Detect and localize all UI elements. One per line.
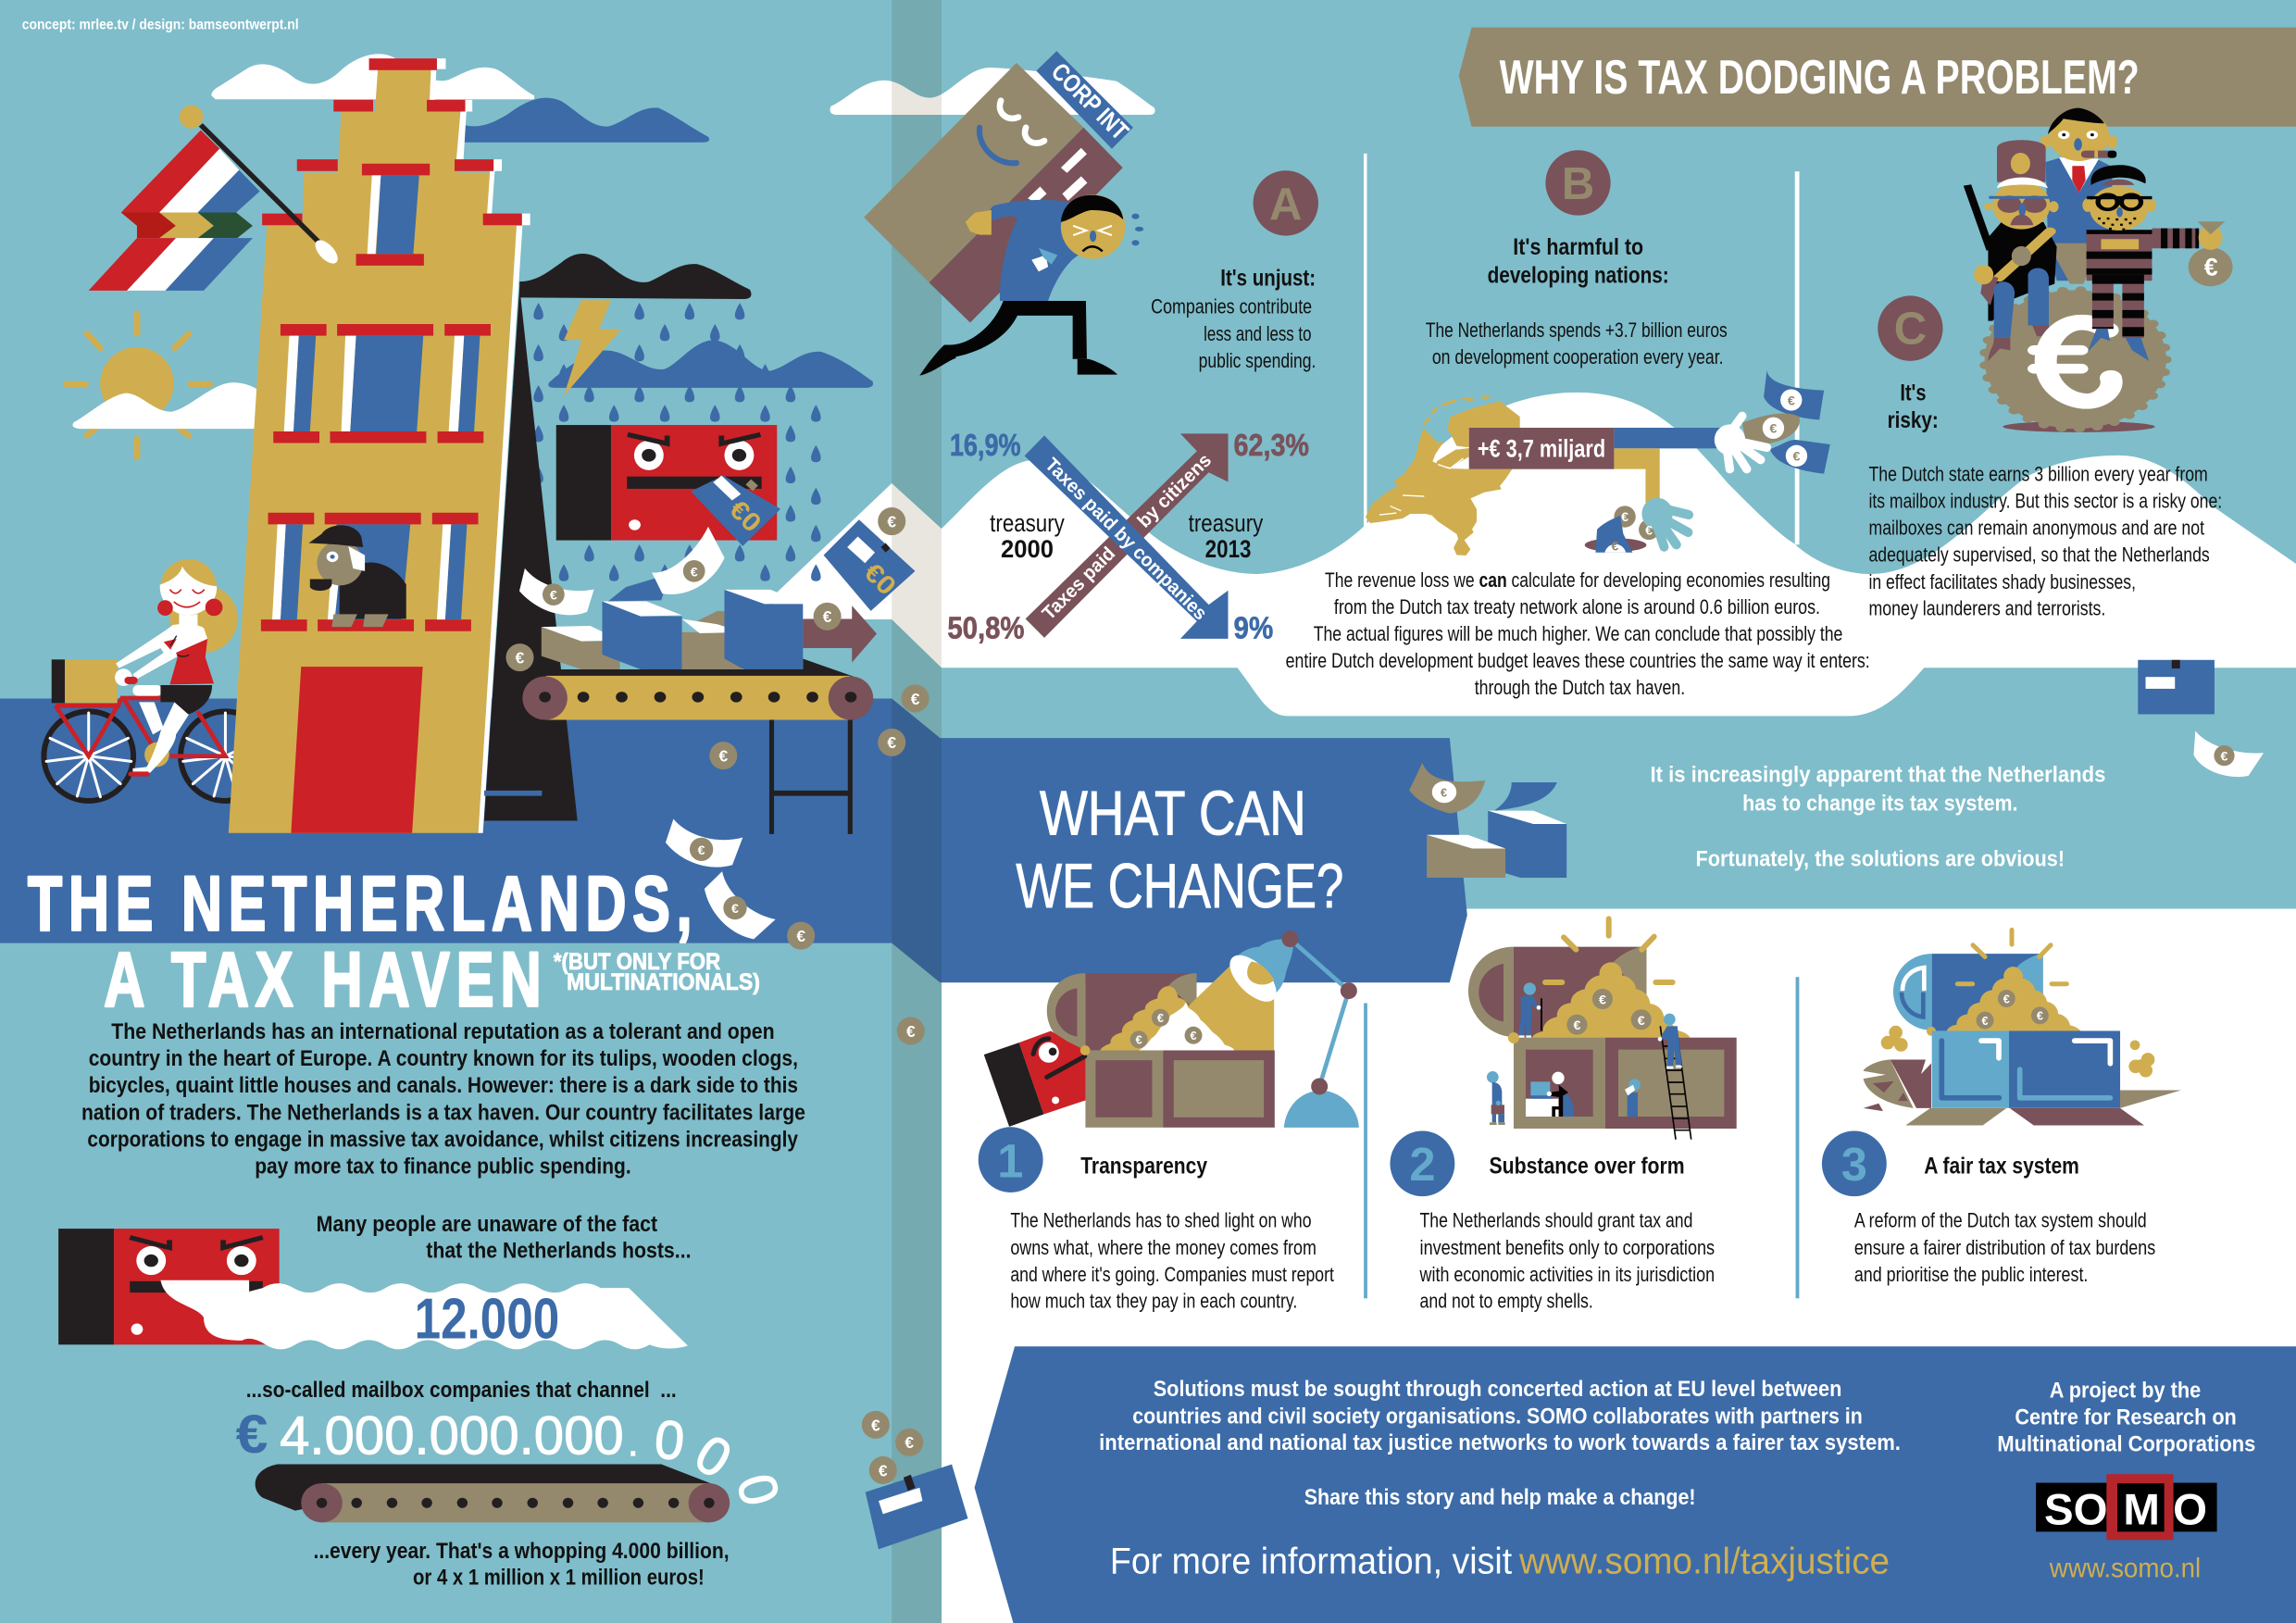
big euro sign on bag bbox=[2035, 322, 2112, 401]
reason C text bbox=[1868, 381, 2222, 619]
fact text: 0 bbox=[685, 1424, 742, 1490]
revenue loss paragraph: The revenue loss we can calculate for developing economies resulting bbox=[1325, 568, 1830, 592]
fact text: ...every year. That's a whopping 4.000 billion, bbox=[313, 1540, 730, 1564]
white hand with banknotes bbox=[1715, 370, 1830, 474]
numbers: 1 bbox=[997, 1135, 1023, 1188]
chest base bbox=[1932, 1030, 2120, 1108]
gold nuggets bbox=[1881, 1026, 2154, 1077]
solution 2 text: The Netherlands should grant tax and bbox=[1420, 1208, 1692, 1231]
euro coins: € bbox=[1645, 523, 1653, 538]
SOMO web address: www.somo.nl bbox=[2049, 1553, 2201, 1583]
euro coins: € bbox=[1769, 422, 1777, 437]
flaps bbox=[1905, 1090, 2181, 1125]
euro coins: € bbox=[871, 1416, 880, 1434]
blue ground band and what can we change banner bbox=[0, 698, 1467, 982]
solution 2 text: Substance over form bbox=[1490, 1154, 1685, 1180]
bicycle frame and basket bbox=[52, 659, 225, 767]
fact text: that the Netherlands hosts... bbox=[426, 1240, 692, 1264]
reason C text: The Dutch state earns 3 billion every year from bbox=[1868, 462, 2208, 485]
call to action text: countries and civil society organisations. SOMO collaborates with partners in bbox=[1132, 1405, 1863, 1429]
reason A text: It's unjust: bbox=[1220, 265, 1316, 291]
main title: MULTINATIONALS) bbox=[567, 969, 760, 995]
illustration: man carrying corporate box, tax cross chart bbox=[864, 51, 1367, 639]
reason B text: on development cooperation every year. bbox=[1432, 345, 1724, 368]
fact text: 12.000 bbox=[415, 1288, 559, 1352]
reason A text: less and less to bbox=[1204, 322, 1312, 345]
column dividers bbox=[1366, 977, 1797, 1298]
chest 1 with lamp and mailbox bbox=[984, 930, 1359, 1128]
reason A text: public spending. bbox=[1199, 349, 1316, 372]
fact text: ...so-called mailbox companies that channel ... bbox=[246, 1379, 677, 1403]
solution 3 text: ensure a fairer distribution of tax burdens bbox=[1854, 1236, 2155, 1259]
reason B text: The Netherlands spends +3.7 billion euros bbox=[1426, 318, 1728, 342]
white lower right panel bbox=[942, 909, 2296, 1623]
solution 2 text: with economic activities in its jurisdiction bbox=[1419, 1263, 1715, 1286]
white cloud behind carrying man bbox=[830, 68, 1155, 115]
euro coins: € bbox=[1157, 1012, 1164, 1025]
boss with cigar bbox=[2040, 108, 2117, 281]
euro coins: € bbox=[905, 1433, 914, 1452]
treasury labels bbox=[990, 509, 1264, 563]
ponytail bbox=[169, 585, 238, 653]
statistics bbox=[947, 429, 1309, 646]
solution 1 text: Transparency bbox=[1080, 1154, 1207, 1180]
letter B: B bbox=[1562, 159, 1594, 209]
euro coins: € bbox=[1441, 786, 1447, 799]
solution 2 text: and not to empty shells. bbox=[1420, 1289, 1593, 1312]
main title bbox=[28, 859, 760, 1023]
arrow label: companies: Taxes paid by companies bbox=[1041, 454, 1211, 624]
revenue loss paragraph: through the Dutch tax haven. bbox=[1475, 676, 1685, 699]
euro coins: € bbox=[1136, 1034, 1142, 1047]
boxes on conveyor bbox=[542, 574, 803, 669]
vertical divider bbox=[1364, 154, 1367, 527]
chest lid bbox=[1047, 973, 1196, 1050]
white ribbon bbox=[160, 1280, 688, 1349]
arrow label: taxes paid: Taxes paid bbox=[1038, 543, 1119, 624]
solution 2 text: investment benefits only to corporations bbox=[1420, 1236, 1715, 1259]
euro coins: € bbox=[1788, 393, 1795, 408]
light rays bbox=[1957, 930, 2066, 984]
person with paper bbox=[1625, 1079, 1641, 1117]
reason B text: developing nations: bbox=[1488, 262, 1669, 288]
euro coins: € bbox=[516, 648, 525, 667]
numbers bbox=[997, 1135, 1867, 1191]
revenue loss paragraph: from the Dutch tax treaty network alone is around 0.6 billion euros. bbox=[1334, 595, 1820, 618]
gold pile bbox=[1100, 986, 1189, 1050]
blue cloud bbox=[464, 98, 709, 143]
euro coins: € bbox=[698, 843, 705, 858]
letter B badge circle bbox=[1545, 150, 1611, 216]
revenue loss paragraph bbox=[1286, 568, 1870, 699]
call to action text: international and national tax justice networks to work towards a fairer tax system. bbox=[1099, 1431, 1901, 1455]
illustration: Netherlands map, aid arm, hands and banknotes bbox=[1366, 370, 1830, 556]
blue box bbox=[2138, 660, 2215, 714]
statistics: 62,3% bbox=[1234, 429, 1309, 463]
banknotes bbox=[517, 527, 2264, 947]
main title: THE NETHERLANDS, bbox=[28, 859, 698, 946]
euro coins: € bbox=[1573, 1018, 1580, 1033]
lamp bbox=[1222, 930, 1359, 1128]
letter A badge circle bbox=[1254, 170, 1318, 236]
call to action text: Solutions must be sought through concerted action at EU level between bbox=[1154, 1378, 1841, 1402]
reason A text: Companies contribute bbox=[1151, 294, 1312, 318]
project credit: A project by the bbox=[2050, 1379, 2201, 1403]
solution 3 text: A fair tax system bbox=[1924, 1154, 2079, 1180]
euro coins: € bbox=[879, 1461, 888, 1479]
SOMO logo bbox=[2036, 1474, 2217, 1540]
reason C text: mailboxes can remain anonymous and are not bbox=[1868, 517, 2204, 540]
corporate box bbox=[864, 51, 1133, 322]
person with stick bbox=[1518, 982, 1542, 1038]
chest 3 bbox=[1864, 930, 2181, 1125]
black storm cloud bbox=[519, 254, 751, 299]
heading: what can we change: WE CHANGE? bbox=[1016, 851, 1343, 921]
revenue loss paragraph: entire Dutch development budget leaves these countries the same way it enters: bbox=[1286, 649, 1870, 672]
soldier bbox=[1967, 140, 2059, 361]
light rays bbox=[1545, 918, 1673, 982]
euro coins: € bbox=[906, 1022, 916, 1041]
map of the Netherlands bbox=[1366, 396, 1520, 556]
white mountain on fold bbox=[773, 483, 942, 668]
call to action text bbox=[1099, 1378, 1901, 1581]
ladder bbox=[1660, 1026, 1691, 1140]
illustration: clouds, sun, house, flag, mailbox, conveyor bbox=[66, 54, 915, 834]
bottom blue letter on fold bbox=[866, 1465, 967, 1549]
euro coins: € bbox=[2204, 253, 2218, 281]
fact text: € bbox=[236, 1405, 268, 1465]
centre fold strip bbox=[892, 0, 942, 1623]
blue letter on fold bbox=[824, 519, 915, 611]
intro statement: It is increasingly apparent that the Netherlands bbox=[1650, 764, 2105, 788]
sun bbox=[66, 314, 209, 456]
call to action text: www.somo.nl/taxjustice bbox=[1518, 1541, 1890, 1581]
chest base bbox=[1508, 1032, 1737, 1129]
black wedge behind house bbox=[484, 287, 578, 821]
carrying man bbox=[919, 194, 1143, 376]
money bag with three villains bbox=[1967, 108, 2233, 432]
euro coins: € bbox=[718, 746, 728, 765]
flag staff bbox=[180, 106, 342, 267]
project credit bbox=[1997, 1379, 2255, 1456]
girl on bicycle bbox=[44, 559, 270, 801]
sun cloud bbox=[72, 382, 257, 429]
fact text: . bbox=[629, 1425, 638, 1464]
heading: what can we change bbox=[1016, 779, 1343, 921]
flying items, number badges and dividers bbox=[979, 763, 1887, 1298]
intro paragraph: pay more tax to finance public spending. bbox=[255, 1155, 631, 1180]
reason C text: adequately supervised, so that the Netherlands bbox=[1868, 543, 2210, 567]
SOMO logo: O bbox=[2074, 1485, 2107, 1534]
flying note and boxes bbox=[1409, 763, 1566, 878]
euro coins: € bbox=[1982, 1015, 1989, 1028]
euro coins: € bbox=[731, 902, 739, 917]
chest base bbox=[1085, 1050, 1275, 1128]
intro paragraph bbox=[81, 1020, 805, 1180]
euro coins: € bbox=[911, 690, 920, 708]
euro coins: € bbox=[2037, 1010, 2043, 1023]
person on ladder bbox=[1658, 1014, 1682, 1068]
wheels bbox=[44, 711, 270, 801]
intro statement bbox=[1650, 764, 2105, 871]
dividers, badges and blue box bbox=[1545, 150, 2215, 714]
numbers: 3 bbox=[1841, 1138, 1867, 1191]
reason C text: risky: bbox=[1888, 407, 1939, 433]
fact text: Many people are unaware of the fact bbox=[317, 1213, 657, 1237]
euro coins: € bbox=[887, 733, 896, 752]
white pile bbox=[1139, 1003, 1234, 1050]
chest 2 with people bbox=[1468, 918, 1737, 1140]
treasury labels: treasury bbox=[1189, 509, 1264, 537]
solution 2 text bbox=[1419, 1154, 1715, 1312]
fact text: 4.000.000.000 bbox=[280, 1406, 624, 1467]
amount label text: +€ 3,7 miljard bbox=[1478, 434, 1605, 462]
solution 1 text: owns what, where the money comes from bbox=[1010, 1236, 1316, 1259]
reason C text: in effect facilitates shady businesses, bbox=[1868, 570, 2136, 593]
solution 3 text bbox=[1854, 1154, 2155, 1286]
flag bbox=[89, 131, 260, 291]
conveyor belt bbox=[484, 659, 873, 834]
girl body bbox=[115, 624, 214, 777]
number badges bbox=[979, 1127, 1887, 1196]
person at computer bbox=[1526, 1072, 1574, 1117]
euro coins: € bbox=[550, 589, 557, 604]
solution 1 text: The Netherlands has to shed light on who bbox=[1010, 1208, 1312, 1231]
euro coins: € bbox=[2003, 993, 2010, 1005]
euro coins: € bbox=[823, 607, 832, 626]
euro coins: € bbox=[1191, 1030, 1197, 1042]
intro statement: has to change its tax system. bbox=[1742, 793, 2017, 817]
euro coins: € bbox=[2221, 750, 2228, 765]
arrow out of conveyor bbox=[803, 606, 877, 663]
fact text: 0 bbox=[652, 1409, 687, 1472]
euro coins: € bbox=[887, 512, 896, 531]
treasury labels: 2013 bbox=[1205, 535, 1252, 563]
solution 1 text bbox=[1010, 1154, 1334, 1312]
reason B text: It's harmful to bbox=[1513, 234, 1643, 260]
euro coins: € bbox=[1638, 1014, 1645, 1029]
credit line: concept: mrlee.tv / design: bamseontwerpt.nl bbox=[22, 18, 299, 33]
euro zero on fold letter: €0 bbox=[858, 557, 902, 602]
letter A: A bbox=[1269, 180, 1302, 230]
gold pile bbox=[1532, 962, 1691, 1038]
euro coins: € bbox=[691, 565, 698, 580]
letter C badge circle bbox=[1878, 295, 1943, 361]
small angry mailbox bbox=[58, 1229, 280, 1344]
project credit: Multinational Corporations bbox=[1997, 1432, 2255, 1456]
girl head bbox=[157, 559, 222, 628]
white cloud behind house bbox=[211, 54, 534, 99]
reason C text: money launderers and terrorists. bbox=[1868, 596, 2105, 619]
fact text: 0 bbox=[725, 1468, 791, 1512]
revenue loss paragraph: The actual figures will be much higher. We can conclude that possibly the bbox=[1314, 622, 1842, 645]
intro paragraph: bicycles, quaint little houses and canals. However: there is a dark side to this bbox=[89, 1074, 798, 1098]
gold pile bbox=[1947, 967, 2080, 1030]
blue rain cloud bbox=[548, 340, 873, 388]
reason B text bbox=[1426, 234, 1728, 368]
SOMO logo: S bbox=[2044, 1485, 2074, 1534]
corp int sign label: CORP INT bbox=[1046, 57, 1134, 145]
intro paragraph: nation of traders. The Netherlands is a tax haven. Our country facilitates large bbox=[81, 1101, 805, 1125]
fact text: or 4 x 1 million x 1 million euros! bbox=[413, 1566, 705, 1590]
sad mailbox bbox=[984, 1030, 1090, 1127]
robber bbox=[2082, 165, 2233, 361]
angry mailbox in rain bbox=[556, 425, 780, 546]
euro coins: € bbox=[1599, 993, 1606, 1008]
mailbox fact graphic bbox=[58, 1229, 730, 1522]
aid arm bbox=[1469, 428, 1722, 503]
raindrops bbox=[533, 303, 821, 581]
arrow: taxes paid by citizens bbox=[1026, 433, 1229, 638]
canal house bbox=[229, 58, 530, 833]
main title: A TAX HAVEN bbox=[104, 936, 548, 1023]
hole with money and teal hand bbox=[1585, 498, 1689, 553]
main title: *(BUT ONLY FOR bbox=[554, 949, 720, 975]
arrow: taxes paid by companies bbox=[1025, 435, 1229, 639]
solution 1 text: how much tax they pay in each country. bbox=[1010, 1289, 1297, 1312]
reason A text bbox=[1151, 265, 1316, 372]
torn box remains bbox=[1864, 1059, 1931, 1111]
treasury labels: 2000 bbox=[1001, 535, 1054, 563]
euro coins: € bbox=[796, 927, 805, 945]
intro statement: Fortunately, the solutions are obvious! bbox=[1696, 847, 2065, 871]
fact text bbox=[236, 1213, 791, 1590]
numbers: 2 bbox=[1409, 1138, 1435, 1191]
euro coins: € bbox=[1611, 540, 1618, 555]
statistics: 50,8% bbox=[947, 612, 1025, 646]
euro coins: € bbox=[1793, 450, 1801, 465]
call to action text: For more information, visit bbox=[1110, 1541, 1512, 1581]
statistics: 9% bbox=[1234, 612, 1273, 646]
statistics: 16,9% bbox=[950, 429, 1021, 463]
white wave area, top right bbox=[942, 393, 2296, 716]
solution 3 text: and prioritise the public interest. bbox=[1854, 1263, 2088, 1286]
intro paragraph: The Netherlands has an international reputation as a tolerant and open bbox=[111, 1020, 775, 1044]
small conveyor bbox=[256, 1465, 730, 1522]
funnel neck of bag bbox=[2048, 243, 2101, 284]
SOMO logo: M bbox=[2123, 1485, 2160, 1534]
call to action text: Share this story and help make a change! bbox=[1304, 1486, 1696, 1510]
euro zero on mailbox letter: €0 bbox=[723, 494, 767, 539]
reason C text: It's bbox=[1900, 381, 1926, 406]
euro coins bbox=[505, 253, 2235, 1484]
intro paragraph: corporations to engage in massive tax avoidance, whilst citizens increasingly bbox=[87, 1128, 799, 1152]
second divider bbox=[1795, 171, 1800, 544]
bottom call to action panel bbox=[975, 1346, 2296, 1623]
person with briefcase bbox=[1487, 1071, 1505, 1125]
title banner: why is tax dodging a problem bbox=[1459, 28, 2296, 127]
money bag bbox=[1985, 290, 2166, 432]
lamp light beam bbox=[1160, 965, 1274, 1050]
solution 1 text: and where it's going. Companies must report bbox=[1010, 1263, 1334, 1286]
euro coins: € bbox=[1621, 510, 1628, 525]
intro paragraph: country in the heart of Europe. A country known for its tulips, wooden clogs, bbox=[89, 1047, 798, 1071]
treasury labels: treasury bbox=[990, 509, 1065, 537]
heading: what can we change: WHAT CAN bbox=[1040, 779, 1306, 849]
solution 3 text: A reform of the Dutch tax system should bbox=[1854, 1208, 2147, 1231]
project credit: Centre for Research on bbox=[2015, 1405, 2237, 1429]
man with pipe in window bbox=[309, 525, 406, 627]
arrow label: by citizens: by citizens bbox=[1133, 450, 1216, 532]
letter C: C bbox=[1894, 305, 1927, 355]
chest lid bbox=[1893, 954, 2043, 1030]
lightning bolt bbox=[564, 300, 621, 395]
SOMO logo: O bbox=[2173, 1485, 2207, 1534]
chest lid bbox=[1468, 947, 1646, 1038]
